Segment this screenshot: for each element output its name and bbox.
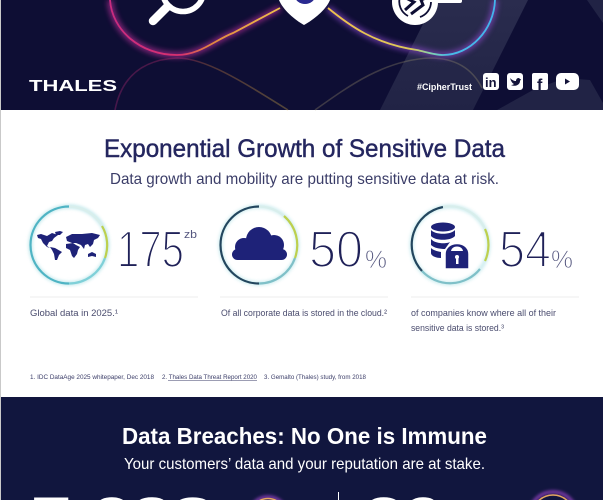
stat number 50: 50 — [309, 221, 363, 279]
subheading: Your customers’ data and your reputation are at stake. — [124, 456, 485, 473]
panel: stat global data — [30, 206, 198, 318]
icon: database and lock — [431, 222, 469, 269]
footnotes: 3. Gemalto (Thales) study, from 2018 — [264, 375, 367, 381]
icon: facebook: f — [537, 77, 543, 94]
icon: facebook — [532, 73, 548, 94]
label: sensitive data is stored.³ — [411, 323, 504, 333]
diagonal light band — [380, 0, 528, 110]
panel: stat cloud — [220, 206, 388, 318]
icon: linkedin: in — [485, 75, 497, 90]
heading: data breaches: Data Breaches: No One is Immune — [122, 423, 487, 449]
panel: top banner — [1, 0, 603, 110]
heading: exponential growth: Exponential Growth of Sensitive Data — [104, 135, 505, 163]
subheading: Data growth and mobility are putting sensitive data at risk. — [110, 171, 499, 188]
label: Of all corporate data is stored in the cloud.² — [221, 308, 387, 318]
panel: data breaches — [1, 397, 603, 500]
icon: ring right — [529, 492, 577, 500]
stat number 54: 54 — [499, 221, 551, 279]
left edge — [0, 0, 1, 500]
label: of companies know where all of their — [411, 308, 556, 318]
stat number 175: 175 — [117, 221, 184, 279]
unit zb: zb — [184, 229, 197, 241]
neon curve — [110, 0, 495, 55]
icon: location pin — [279, 0, 330, 25]
hashtag: #CipherTrust — [417, 82, 473, 93]
icon: magnifier — [153, 0, 204, 21]
icon: linkedin — [483, 73, 499, 90]
neon curve reflection — [115, 58, 482, 110]
label: Global data in 2025.¹ — [30, 308, 118, 318]
icon: world map — [37, 231, 100, 260]
logo: Thales: THALES — [29, 78, 117, 95]
icon: ring left — [249, 497, 287, 500]
label — [411, 308, 556, 333]
icon: cloud ring — [220, 206, 298, 284]
icon: database ring — [412, 206, 488, 284]
footnotes — [30, 375, 367, 381]
divider — [338, 492, 340, 500]
icon: globe ring — [30, 206, 108, 284]
icon: twitter — [507, 73, 523, 90]
panel: stat database — [411, 206, 579, 333]
icon: cloud — [232, 227, 287, 260]
footnotes: 1. IDC DataAge 2025 whitepaper, Dec 2018 — [30, 375, 155, 381]
footnotes: 2. Thales Data Threat Report 2020 — [162, 375, 258, 381]
icon: globe and key — [392, 0, 462, 25]
neon curve glow — [110, 0, 495, 55]
icon: youtube — [556, 73, 579, 90]
unit percent: % — [365, 246, 387, 274]
unit percent: % — [551, 246, 573, 274]
